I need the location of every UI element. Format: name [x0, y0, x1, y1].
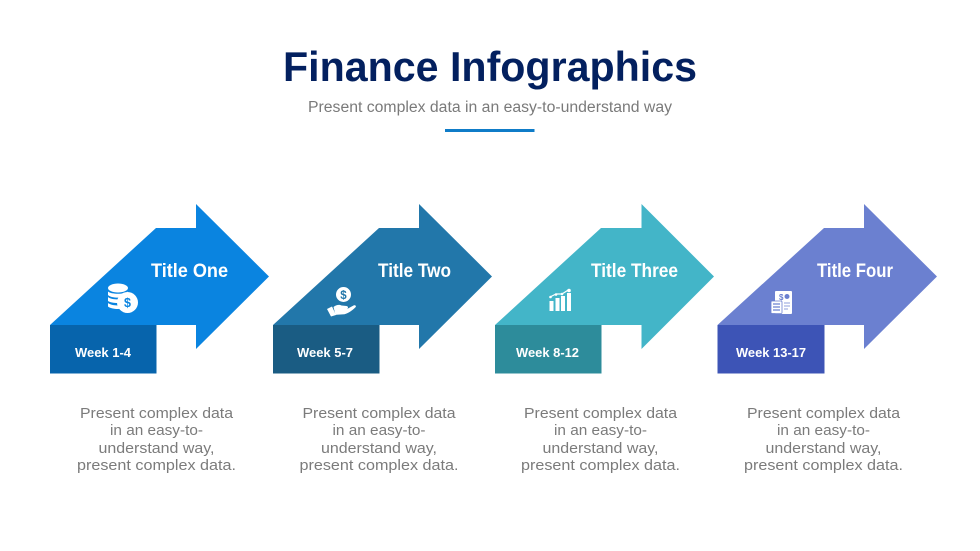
accent rule — [445, 129, 534, 132]
description three: present complex data. — [521, 458, 680, 474]
description two: present complex data. — [300, 458, 458, 474]
heading: title two: Title Two — [378, 261, 451, 282]
description three: understand way, — [542, 441, 658, 457]
arrow three — [495, 204, 714, 349]
description two: understand way, — [321, 441, 437, 457]
icon: finance documents: $ — [779, 293, 784, 302]
arrow four — [718, 204, 937, 349]
label: week 8-12: Week 8-12 — [516, 346, 579, 360]
label: week 13-17: Week 13-17 — [736, 346, 806, 360]
panel: step two — [273, 204, 492, 474]
arrow two — [273, 204, 492, 349]
title: Finance Infographics — [283, 43, 697, 90]
icon: finance documents — [771, 291, 792, 314]
label: week 5-7: Week 5-7 — [297, 346, 353, 360]
description four — [744, 406, 903, 474]
description two: Present complex data — [302, 406, 457, 422]
description three: Present complex data — [524, 406, 678, 422]
description one: understand way, — [98, 441, 214, 457]
description one: in an easy-to- — [110, 423, 203, 439]
heading: title one: Title One — [151, 261, 228, 282]
week box one — [50, 325, 156, 374]
description four: in an easy-to- — [777, 423, 870, 439]
description one: Present complex data — [80, 406, 234, 422]
description four: Present complex data — [747, 406, 901, 422]
week box three — [495, 325, 602, 374]
description three: in an easy-to- — [554, 423, 647, 439]
label: week 1-4: Week 1-4 — [75, 346, 131, 360]
subtitle: Present complex data in an easy-to-understand way — [308, 99, 672, 116]
description four: understand way, — [766, 441, 882, 457]
week box four — [718, 325, 824, 374]
description three — [521, 406, 680, 474]
description one — [77, 406, 236, 474]
icon: growth chart — [549, 289, 571, 311]
description two: in an easy-to- — [332, 423, 426, 439]
panel: step one — [50, 204, 269, 474]
icon: coins: $ — [124, 296, 131, 310]
heading: title four: Title Four — [817, 261, 894, 282]
arrow one — [50, 204, 269, 349]
week box two — [273, 325, 380, 374]
icon: hand holding coin — [327, 287, 356, 316]
icon: coins — [108, 284, 138, 313]
panel: step three — [495, 204, 714, 474]
description four: present complex data. — [744, 458, 903, 474]
heading: title three: Title Three — [591, 261, 678, 282]
icon: hand holding coin: $ — [340, 290, 347, 302]
description two — [300, 406, 458, 474]
panel: step four — [718, 204, 937, 474]
description one: present complex data. — [77, 458, 236, 474]
